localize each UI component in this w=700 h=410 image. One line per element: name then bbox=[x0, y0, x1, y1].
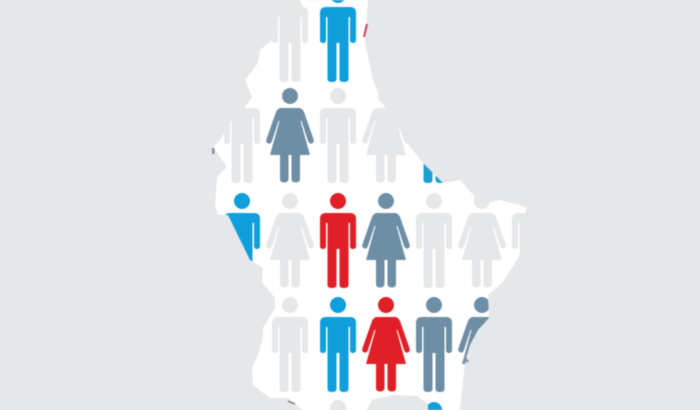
figure: row 3 grey woman bbox=[266, 193, 314, 288]
figure: row 4 grey man bbox=[272, 297, 308, 392]
fragment: steel spot on south-east border bbox=[465, 358, 468, 362]
figure: row 2 steel woman bbox=[266, 88, 314, 182]
figure: row 3 red man bbox=[320, 193, 356, 288]
figure: row 2 grey woman bbox=[362, 94, 407, 182]
figure: row 4 red woman bbox=[362, 297, 410, 392]
figure: row 3 blue man bbox=[224, 192, 261, 262]
figure: row 5 grey head bbox=[330, 400, 346, 410]
map of the country bbox=[213, 0, 527, 410]
figure: row 3 grey man bbox=[512, 206, 526, 253]
figure: row 1 blue man bbox=[320, 0, 356, 82]
figure: row 1 grey man bbox=[272, 0, 308, 82]
figure: row 3 grey woman bbox=[458, 193, 506, 288]
figure: row 3 grey man bbox=[416, 193, 452, 288]
figure: row 5 blue head bbox=[426, 402, 442, 410]
figure: row 4 steel woman bbox=[458, 296, 490, 365]
infographic: people map bbox=[212, 0, 526, 410]
figure: row 2 blue man bbox=[422, 163, 443, 184]
fragment: dark red mark on south border bbox=[288, 401, 295, 404]
figure: row 4 steel man bbox=[416, 297, 452, 392]
figure: row 2 grey man bbox=[320, 88, 356, 183]
figure: row 3 steel woman bbox=[362, 193, 410, 288]
fragment: red sliver on east border bbox=[364, 24, 367, 37]
figure: row 2 grey man bbox=[224, 108, 260, 183]
figure: row 4 blue man bbox=[320, 297, 356, 392]
people figures clipped to the map bbox=[224, 0, 548, 410]
fragment: dark mark on west border bbox=[212, 148, 214, 154]
